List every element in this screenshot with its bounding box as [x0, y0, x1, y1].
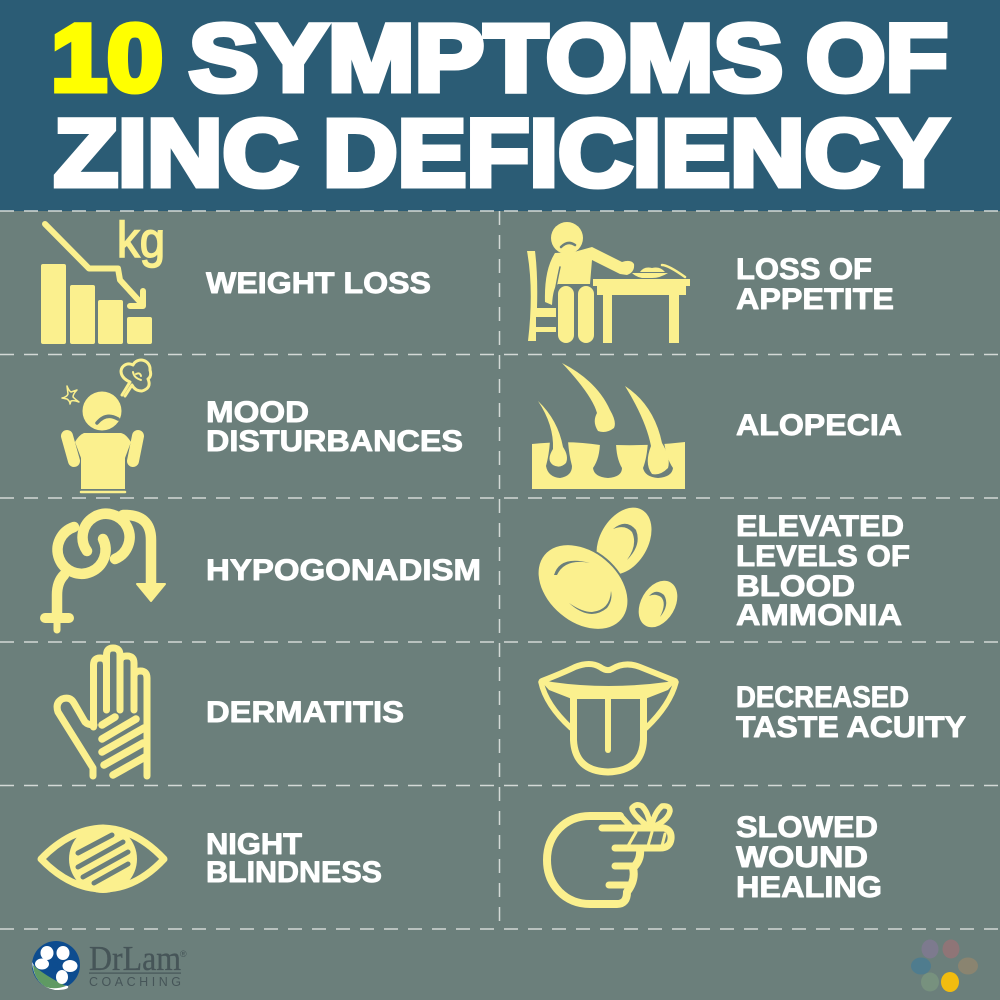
icon: hypogonadism [45, 514, 165, 630]
icon: tongue and lips [539, 664, 678, 772]
label: decreased taste acuity [736, 681, 966, 744]
icon: mood disturbances [62, 360, 151, 492]
label: mood disturbances: MOOD [206, 396, 309, 429]
title banner: DEFICIENCY [323, 100, 948, 206]
label: loss of appetite: LOSS OF [736, 253, 872, 286]
label: elevated levels of blood ammonia: ELEVATED [736, 510, 904, 543]
logo: DrLam Coaching [32, 939, 187, 990]
label: decreased taste acuity: DECREASED [736, 681, 909, 714]
label: loss of appetite [736, 253, 894, 316]
icon: dermatitis hand [57, 648, 147, 776]
logo: DrLam Coaching: COACHING [89, 975, 181, 989]
label: slowed wound healing [736, 811, 882, 904]
label: elevated levels of blood ammonia: LEVELS OF [736, 540, 910, 573]
label: mood disturbances [206, 396, 463, 458]
label: slowed wound healing: HEALING [736, 871, 882, 904]
icon: loss of appetite [527, 222, 690, 343]
label: slowed wound healing: WOUND [736, 841, 868, 874]
title banner: OF [806, 6, 948, 112]
icon: blood cells [519, 498, 685, 649]
label: night blindness: NIGHT [206, 828, 302, 861]
label: night blindness [206, 828, 382, 889]
icon: night blindness eye [41, 825, 164, 893]
icon: weight loss: kg [117, 212, 165, 268]
icon: alopecia [532, 363, 685, 489]
title banner: SYMPTOMS [189, 6, 783, 112]
label: dermatitis: DERMATITIS [206, 696, 404, 729]
label: slowed wound healing: SLOWED [736, 811, 878, 844]
label: elevated levels of blood ammonia [736, 510, 910, 632]
label: elevated levels of blood ammonia: BLOOD [736, 570, 855, 603]
label: hypogonadism: HYPOGONADISM [206, 554, 481, 587]
label: mood disturbances: DISTURBANCES [206, 425, 463, 458]
label: decreased taste acuity: TASTE ACUITY [736, 711, 966, 744]
label: loss of appetite: APPETITE [736, 283, 894, 316]
icon: weight loss [41, 212, 165, 344]
label: weight loss: WEIGHT LOSS [206, 267, 431, 300]
title banner [0, 0, 1000, 211]
label: night blindness: BLINDNESS [206, 856, 382, 889]
label: elevated levels of blood ammonia: AMMONIA [736, 599, 902, 632]
title banner: 10 [51, 6, 163, 112]
title banner: ZINC [54, 100, 298, 206]
logo: DrLam Coaching: ® [180, 949, 187, 959]
label: alopecia: ALOPECIA [736, 409, 902, 442]
icon: bandaged finger [547, 805, 671, 904]
logo: flower mark [911, 940, 978, 992]
logo: DrLam Coaching: DrLam [89, 939, 181, 978]
